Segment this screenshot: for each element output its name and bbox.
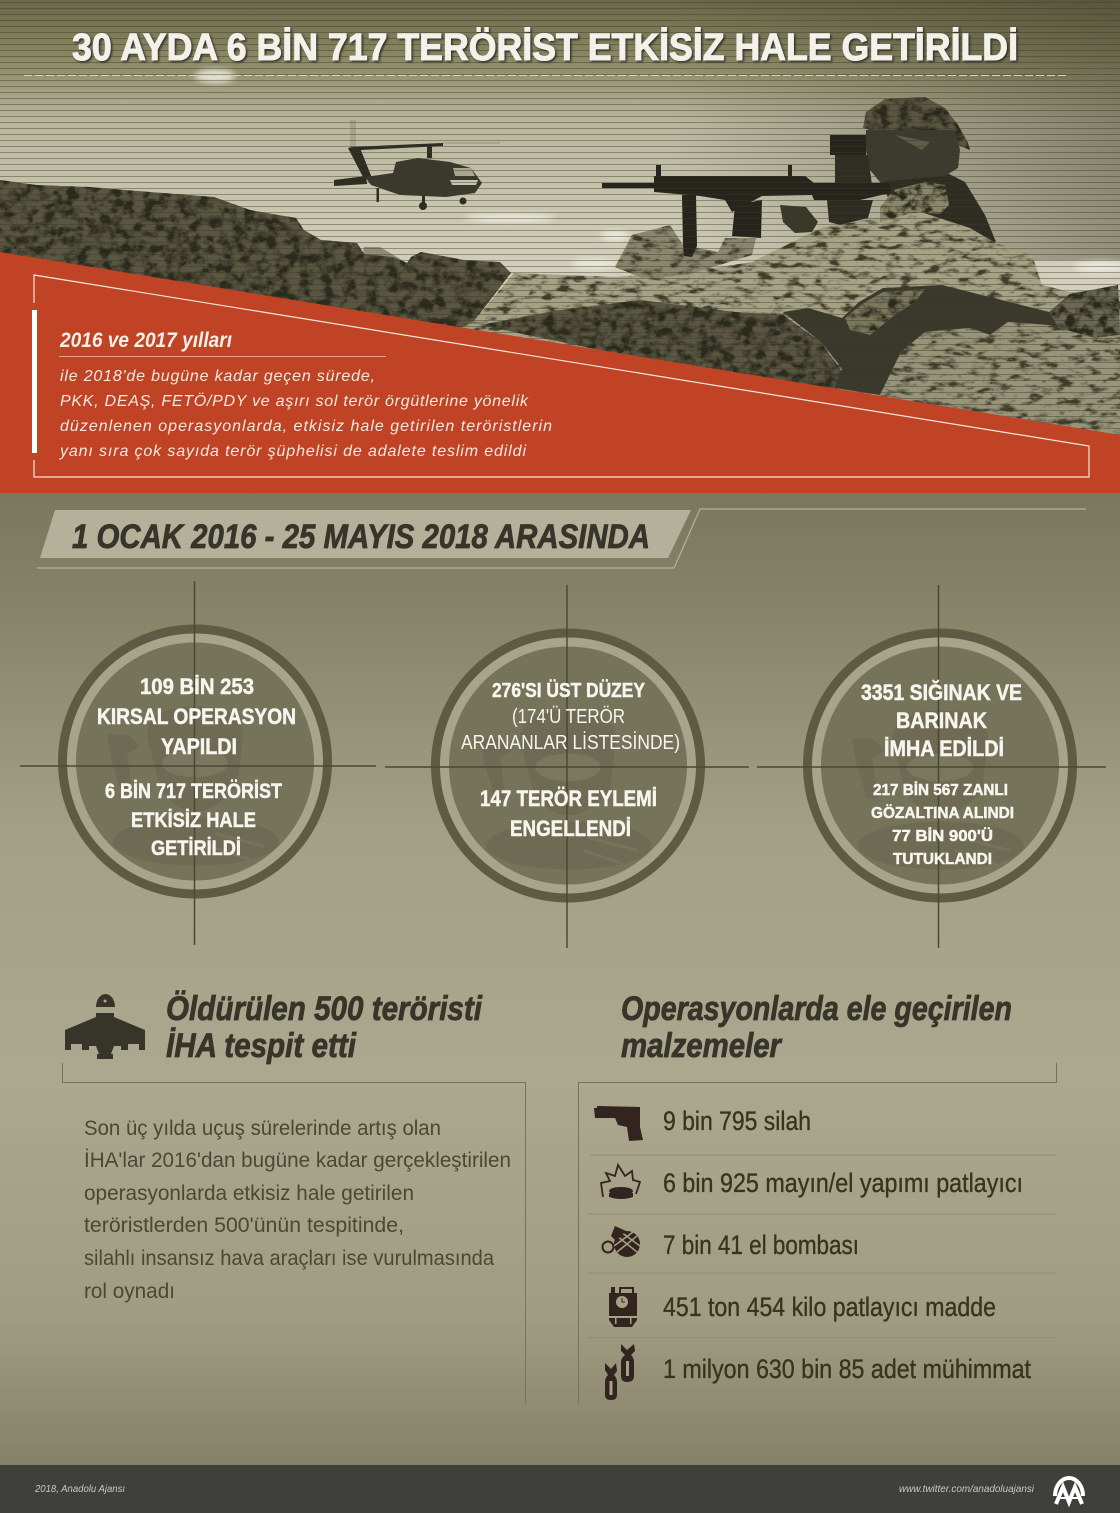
heading: drone: Öldürülen 500 teröristi — [166, 990, 483, 1028]
target circle 1: ETKİSİZ HALE — [131, 809, 256, 832]
target circle 3 — [757, 585, 1106, 948]
soldier body — [880, 172, 996, 242]
rifle — [602, 165, 890, 257]
target circle 2: ENGELLENDİ — [510, 816, 631, 841]
target circle 3: İMHA EDİLDİ — [884, 736, 1004, 761]
target circle 1: GETİRİLDİ — [151, 837, 241, 860]
target circle 3: 3351 SIĞINAK VE — [861, 680, 1022, 705]
item: mines: 6 bin 925 mayın/el yapımı patlayıcı — [663, 1168, 1023, 1198]
panel: red intro — [0, 252, 1120, 493]
target circle 2 — [385, 585, 749, 948]
intro text: PKK, DEAŞ, FETÖ/PDY ve aşırı sol terör örgütlerine yönelik — [60, 392, 529, 410]
target circle 3: TUTUKLANDI — [893, 851, 992, 868]
item: explosives: 451 ton 454 kilo patlayıcı madde — [663, 1292, 996, 1322]
background: lower panel — [0, 493, 1120, 1465]
target circle 2: ARANANLAR LİSTESİNDE) — [461, 731, 680, 754]
target circle 3: 217 BİN 567 ZANLI — [873, 781, 1008, 799]
title: 30 AYDA 6 BİN 717 TERÖRİST ETKİSİZ HALE GETİRİLDİ — [72, 26, 1018, 69]
lower right rock — [880, 322, 1120, 440]
target circle 1: KIRSAL OPERASYON — [97, 704, 296, 729]
target circle 2: 147 TERÖR EYLEMİ — [480, 786, 657, 811]
text: drone paragraph: İHA'lar 2016'dan bugüne kadar gerçekleştirilen — [84, 1149, 511, 1172]
target circle 3: 77 BİN 900'Ü — [892, 826, 993, 845]
intro text: düzenlenen operasyonlarda, etkisiz hale getirilen teröristlerin — [60, 418, 552, 435]
item: weapons — [594, 1106, 811, 1141]
text: drone paragraph: operasyonlarda etkisiz hale getirilen — [84, 1182, 414, 1205]
hero photo: soldier and helicopter — [0, 0, 1120, 440]
heading: drone — [166, 990, 483, 1065]
intro heading: 2016 ve 2017 yılları — [59, 329, 232, 352]
item: ammunition: 1 milyon 630 bin 85 adet mühimmat — [663, 1354, 1031, 1384]
item: weapons: 9 bin 795 silah — [663, 1106, 811, 1136]
credit: 2018, Anadolu Ajansı — [34, 1484, 125, 1495]
target circle 1 — [20, 581, 376, 945]
item: mines — [601, 1165, 1023, 1199]
target circle 2: 276'SI ÜST DÜZEY — [492, 679, 646, 702]
heading: seized materials: Operasyonlarda ele geçirilen — [621, 990, 1012, 1028]
target circle 1: 6 BİN 717 TERÖRİST — [105, 780, 282, 803]
scanlines — [0, 0, 1120, 440]
heading: seized materials: malzemeler — [621, 1027, 783, 1065]
footer — [0, 1465, 1120, 1513]
rocks — [462, 212, 1120, 398]
item: explosives — [609, 1287, 996, 1327]
mountains — [0, 180, 511, 340]
heading: seized materials — [621, 990, 1012, 1065]
helicopter — [334, 120, 500, 210]
target circle 2: (174'Ü TERÖR — [512, 706, 625, 728]
target circle 1: 109 BİN 253 — [140, 674, 254, 699]
twitter link text: www.twitter.com/anadoluajansi — [899, 1483, 1035, 1495]
panel: drone section — [62, 990, 526, 1404]
text: drone paragraph: silahlı insansız hava araçları ise vurulmasında — [84, 1247, 494, 1270]
target circle 3: GÖZALTINA ALINDI — [871, 803, 1014, 822]
icon: AA logo — [1055, 1478, 1083, 1504]
banner: date range — [37, 509, 1086, 568]
soldier — [830, 97, 970, 222]
item: ammunition — [605, 1344, 1031, 1400]
small rock — [615, 225, 756, 278]
banner: date range: 1 OCAK 2016 - 25 MAYIS 2018 ARASINDA — [72, 518, 650, 556]
icon: drone — [65, 994, 145, 1059]
rock shadow — [783, 285, 1060, 395]
intro text — [59, 368, 552, 460]
heading: drone: İHA tespit etti — [166, 1027, 357, 1065]
item: grenades: 7 bin 41 el bombası — [663, 1230, 859, 1260]
text: drone paragraph: Son üç yılda uçuş sürelerinde artış olan — [84, 1117, 441, 1140]
panel: seized materials — [578, 990, 1056, 1404]
target circle 1: YAPILDI — [161, 734, 237, 759]
text: drone paragraph: rol oynadı — [84, 1280, 175, 1303]
text: drone paragraph: teröristlerden 500'ünün tespitinde, — [84, 1214, 404, 1237]
target circle 3: BARINAK — [896, 708, 987, 733]
intro text: yanı sıra çok sayıda terör şüphelisi de adalete teslim edildi — [59, 443, 526, 460]
intro text: ile 2018'de bugüne kadar geçen sürede, — [60, 368, 375, 385]
item: grenades — [602, 1226, 859, 1260]
text: drone paragraph — [84, 1117, 511, 1303]
